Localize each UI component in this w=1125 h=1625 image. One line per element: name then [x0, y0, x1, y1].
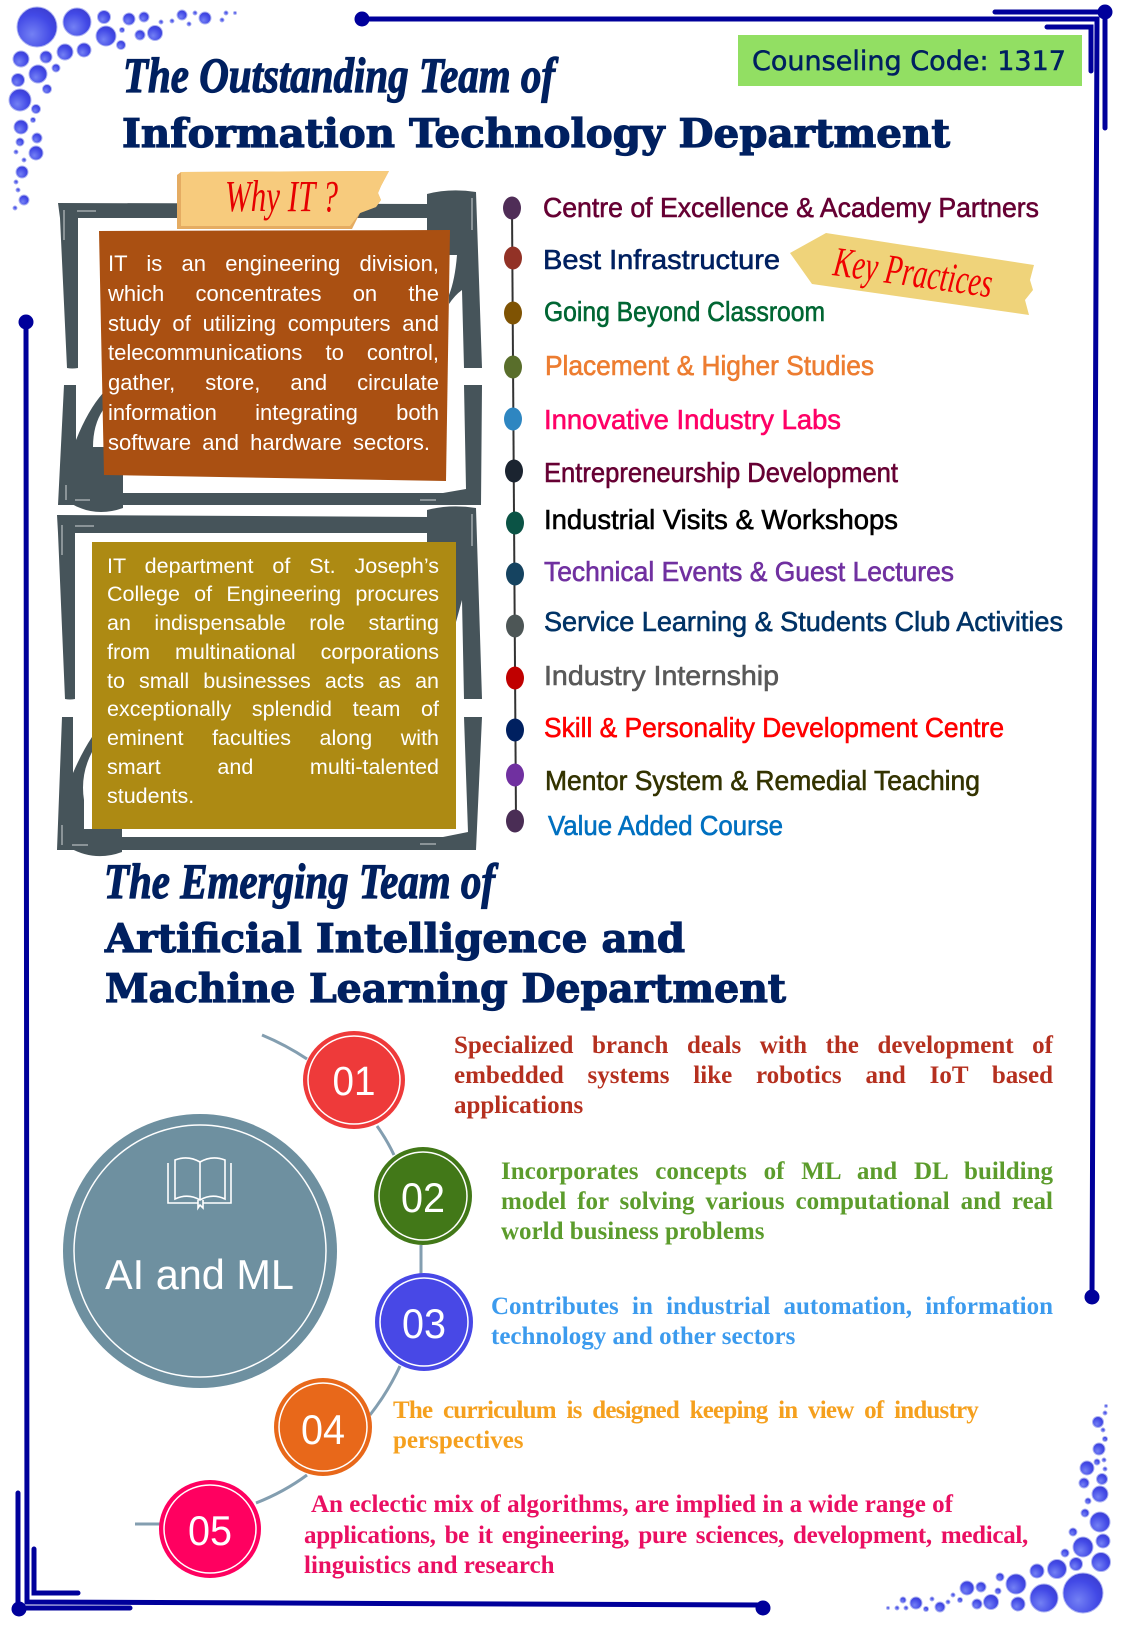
- text block: IT department: eminent faculties along with: [107, 726, 439, 750]
- text: step 05 description: applications, be it engineering, pure sciences, development, medical,: [304, 1522, 1028, 1549]
- list: key practices: Going Beyond Classroom: [544, 296, 825, 327]
- text: step 03 description: technology and other sectors: [491, 1323, 795, 1350]
- text: step 02 description: Incorporates concepts of ML and DL building: [501, 1158, 1053, 1184]
- text block: IT department: to small businesses acts as an: [107, 668, 439, 692]
- text: step 01 description: applications: [454, 1092, 583, 1118]
- text: step 03 description: [491, 1292, 1053, 1350]
- page border: top right corner lines: [354, 4, 1112, 1304]
- text: step 02 description: model for solving various computational and real: [501, 1188, 1053, 1214]
- counseling code badge: Counseling Code: 1317: [752, 46, 1066, 77]
- list: key practices: Best Infrastructure: [543, 244, 780, 275]
- list: key practices: Value Added Course: [548, 810, 783, 841]
- panel background: why IT: [99, 230, 450, 481]
- ribbon: Why IT: Why IT ?: [225, 172, 338, 221]
- heading: Machine Learning Department: Machine Learning Department: [105, 966, 786, 1012]
- step 05: [159, 1480, 261, 1578]
- text block: IT department: students.: [107, 784, 194, 808]
- counseling code badge: [738, 35, 1082, 86]
- main circle: AI and ML: [63, 1114, 337, 1388]
- text: step 01 description: [454, 1032, 1054, 1118]
- main circle: AI and ML: AI and ML: [105, 1251, 294, 1298]
- corner bubbles: top left: [9, 7, 236, 210]
- list: key practices: Innovative Industry Labs: [544, 404, 841, 435]
- step 05: 05: [188, 1507, 232, 1554]
- text: step 04 description: [393, 1396, 978, 1454]
- text block: IT department: [107, 554, 439, 808]
- step 01: [303, 1031, 405, 1129]
- ribbon: Key Practices: Key Practices: [830, 239, 995, 307]
- list: key practices: Technical Events & Guest Lectures: [544, 556, 954, 587]
- text block: IT department: an indispensable role starting: [107, 611, 439, 635]
- step 04: 04: [301, 1406, 345, 1453]
- text block: what IT is: study of utilizing computers and: [108, 311, 439, 336]
- sketch frame: lower: [57, 506, 482, 856]
- text block: what IT is: IT is an engineering division,: [108, 251, 439, 276]
- step 02: [374, 1147, 472, 1245]
- title: The Outstanding Team of: The Outstanding Team of: [123, 47, 559, 103]
- text block: IT department: from multinational corporations: [107, 640, 439, 664]
- text block: what IT is: information integrating both: [108, 400, 439, 425]
- step 03: 03: [402, 1300, 446, 1347]
- list: key practices: Placement & Higher Studies: [545, 350, 874, 381]
- text block: what IT is: which concentrates on the: [108, 281, 439, 306]
- step 01: 01: [332, 1058, 376, 1104]
- list: key practices: [543, 192, 1063, 841]
- sketch frame: upper: [58, 190, 482, 512]
- list: key practices: Entrepreneurship Development: [544, 457, 898, 488]
- text: step 05 description: [304, 1491, 1028, 1579]
- text: step 03 description: Contributes in industrial automation, information: [491, 1292, 1053, 1320]
- connecting arc: [135, 1035, 421, 1524]
- text block: IT department: exceptionally splendid team of: [107, 697, 439, 721]
- text block: IT department: smart and multi-talented: [107, 755, 439, 779]
- heading: Information Technology Department: Information Technology Department: [122, 111, 950, 157]
- step 02: 02: [401, 1174, 445, 1221]
- list: key practices: Service Learning & Students Club Activities: [544, 606, 1063, 637]
- text: step 05 description: linguistics and research: [304, 1552, 554, 1579]
- text: step 01 description: embedded systems like robotics and IoT based: [454, 1062, 1053, 1088]
- list: key practices: Industrial Visits & Workshops: [544, 504, 898, 535]
- text block: IT department: IT department of St. Joseph’s: [107, 554, 439, 578]
- ribbon: Key Practices: [790, 233, 1034, 315]
- text: step 04 description: The curriculum is designed keeping in view of industry: [393, 1396, 978, 1424]
- timeline: key practices dots: [503, 196, 524, 832]
- page border: bottom left corner lines: [12, 314, 770, 1616]
- text: step 02 description: world business problems: [501, 1218, 764, 1244]
- list: key practices: Skill & Personality Development Centre: [544, 712, 1004, 743]
- list: key practices: Mentor System & Remedial Teaching: [545, 765, 980, 796]
- step 03: [375, 1273, 473, 1371]
- text: step 05 description: An eclectic mix of algorithms, are implied in a wide range of: [311, 1491, 953, 1518]
- heading: Artificial Intelligence and: Artificial Intelligence and: [104, 916, 685, 962]
- text block: what IT is: gather, store, and circulate: [108, 370, 439, 395]
- text: step 01 description: Specialized branch deals with the development of: [454, 1032, 1053, 1058]
- text block: what IT is: telecommunications to control,: [108, 340, 439, 365]
- list: key practices: Industry Internship: [544, 660, 779, 691]
- ribbon: Why IT: [177, 171, 389, 229]
- text: step 02 description: [501, 1158, 1053, 1244]
- text: step 04 description: perspectives: [393, 1426, 524, 1454]
- text block: what IT is: [108, 251, 439, 455]
- icon: open book: [168, 1158, 231, 1208]
- title: The Emerging Team of: The Emerging Team of: [104, 853, 499, 909]
- list: key practices: Centre of Excellence & Academy Partners: [543, 192, 1039, 223]
- text block: what IT is: software and hardware sectors.: [108, 430, 430, 455]
- step 04: [274, 1378, 372, 1476]
- text block: IT department: College of Engineering procures: [107, 582, 439, 606]
- panel background: IT department: [92, 542, 456, 829]
- corner bubbles: bottom right: [886, 1404, 1110, 1613]
